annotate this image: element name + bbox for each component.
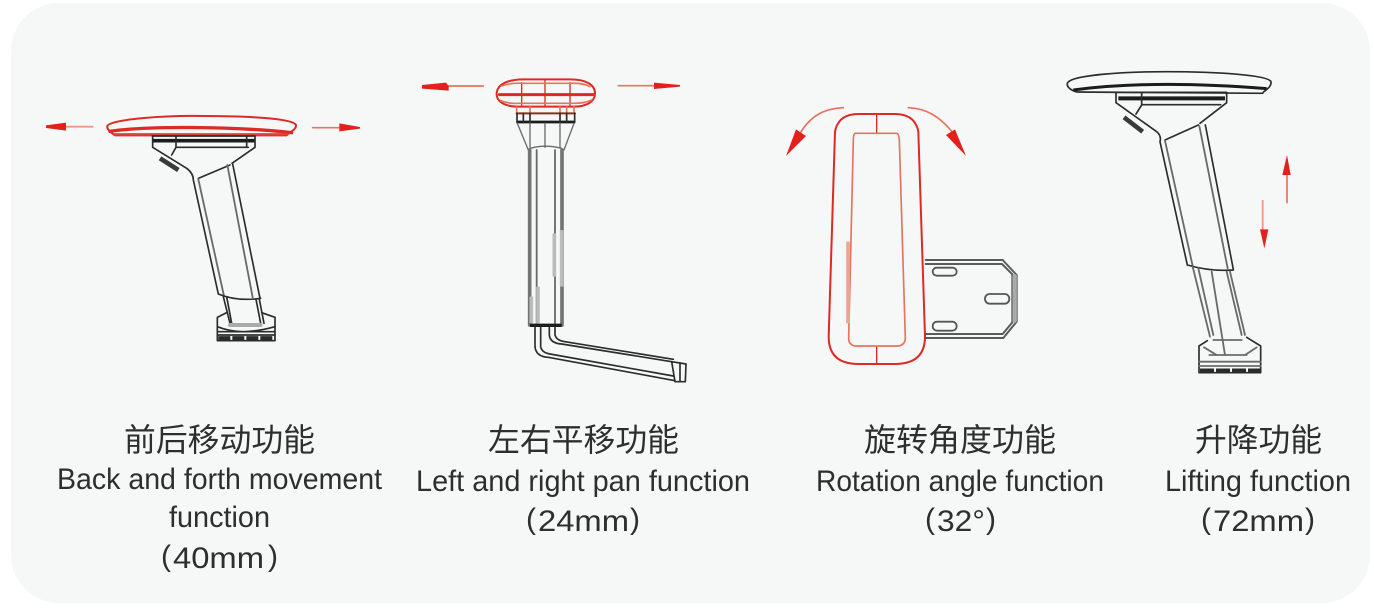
value: 32 degrees bbox=[925, 503, 996, 538]
arrow: left bbox=[46, 123, 93, 131]
heading: 左右平移功能: 左右平移功能 bbox=[488, 422, 679, 458]
value: 24mm bbox=[526, 503, 640, 538]
caption 2 bbox=[416, 422, 750, 538]
arrow: right bbox=[618, 83, 680, 89]
value: 32 degrees: ( bbox=[925, 503, 935, 536]
arrow: rotate left bbox=[786, 108, 843, 156]
heading: 升降功能: 升降功能 bbox=[1195, 422, 1322, 458]
value: 40mm bbox=[161, 540, 278, 575]
arrow: down bbox=[1260, 200, 1268, 248]
figure 1: back and forth movement armrest bbox=[46, 116, 360, 341]
arrow: left bbox=[422, 83, 483, 91]
figure 2: left and right pan armrest bbox=[422, 79, 686, 382]
L-shaped bracket bbox=[535, 327, 686, 382]
value: 72mm: 72mm bbox=[1213, 505, 1304, 538]
value: 72mm: ) bbox=[1305, 503, 1315, 536]
armrest pad in red bbox=[107, 116, 296, 135]
figure 4: lifting armrest bbox=[1067, 72, 1291, 373]
post base bbox=[1199, 337, 1261, 373]
caption 4 bbox=[1165, 422, 1351, 538]
value: 40mm: 40mm bbox=[173, 542, 264, 575]
text: function: function bbox=[169, 501, 270, 534]
heading: 旋转角度功能: 旋转角度功能 bbox=[864, 422, 1056, 458]
post base bbox=[217, 313, 275, 341]
value: 24mm: ) bbox=[630, 503, 640, 536]
armrest pad in black bbox=[1067, 72, 1271, 93]
armrest pad outline in red bbox=[829, 114, 925, 364]
figure 3: rotation angle armrest bbox=[786, 108, 1017, 364]
text: Left and right pan function: Left and right pan function bbox=[416, 465, 750, 498]
mounting plate with slots bbox=[926, 260, 1017, 338]
caption 1 bbox=[57, 422, 383, 575]
caption 3 bbox=[816, 422, 1104, 538]
arm support post bbox=[152, 136, 264, 323]
arrow: up bbox=[1282, 155, 1291, 203]
arm support post bbox=[1116, 92, 1245, 355]
value: 32 degrees: 32° bbox=[937, 505, 985, 538]
arm support post bbox=[517, 113, 575, 325]
value: 24mm: ( bbox=[526, 503, 536, 536]
text: Back and forth movement: Back and forth movement bbox=[57, 463, 383, 496]
text: Rotation angle function: Rotation angle function bbox=[816, 465, 1104, 498]
arrow: rotate right bbox=[908, 108, 966, 156]
arrow: right bbox=[313, 123, 360, 131]
text: Lifting function: Lifting function bbox=[1165, 465, 1351, 498]
heading: 前后移动功能: 前后移动功能 bbox=[124, 422, 315, 458]
value: 40mm: ( bbox=[161, 540, 171, 573]
value: 32 degrees: ) bbox=[986, 503, 996, 536]
value: 72mm bbox=[1201, 503, 1315, 538]
value: 72mm: ( bbox=[1201, 503, 1211, 536]
value: 24mm: 24mm bbox=[538, 505, 629, 538]
value: 40mm: ) bbox=[268, 540, 278, 573]
armrest pad in red bbox=[497, 79, 595, 113]
